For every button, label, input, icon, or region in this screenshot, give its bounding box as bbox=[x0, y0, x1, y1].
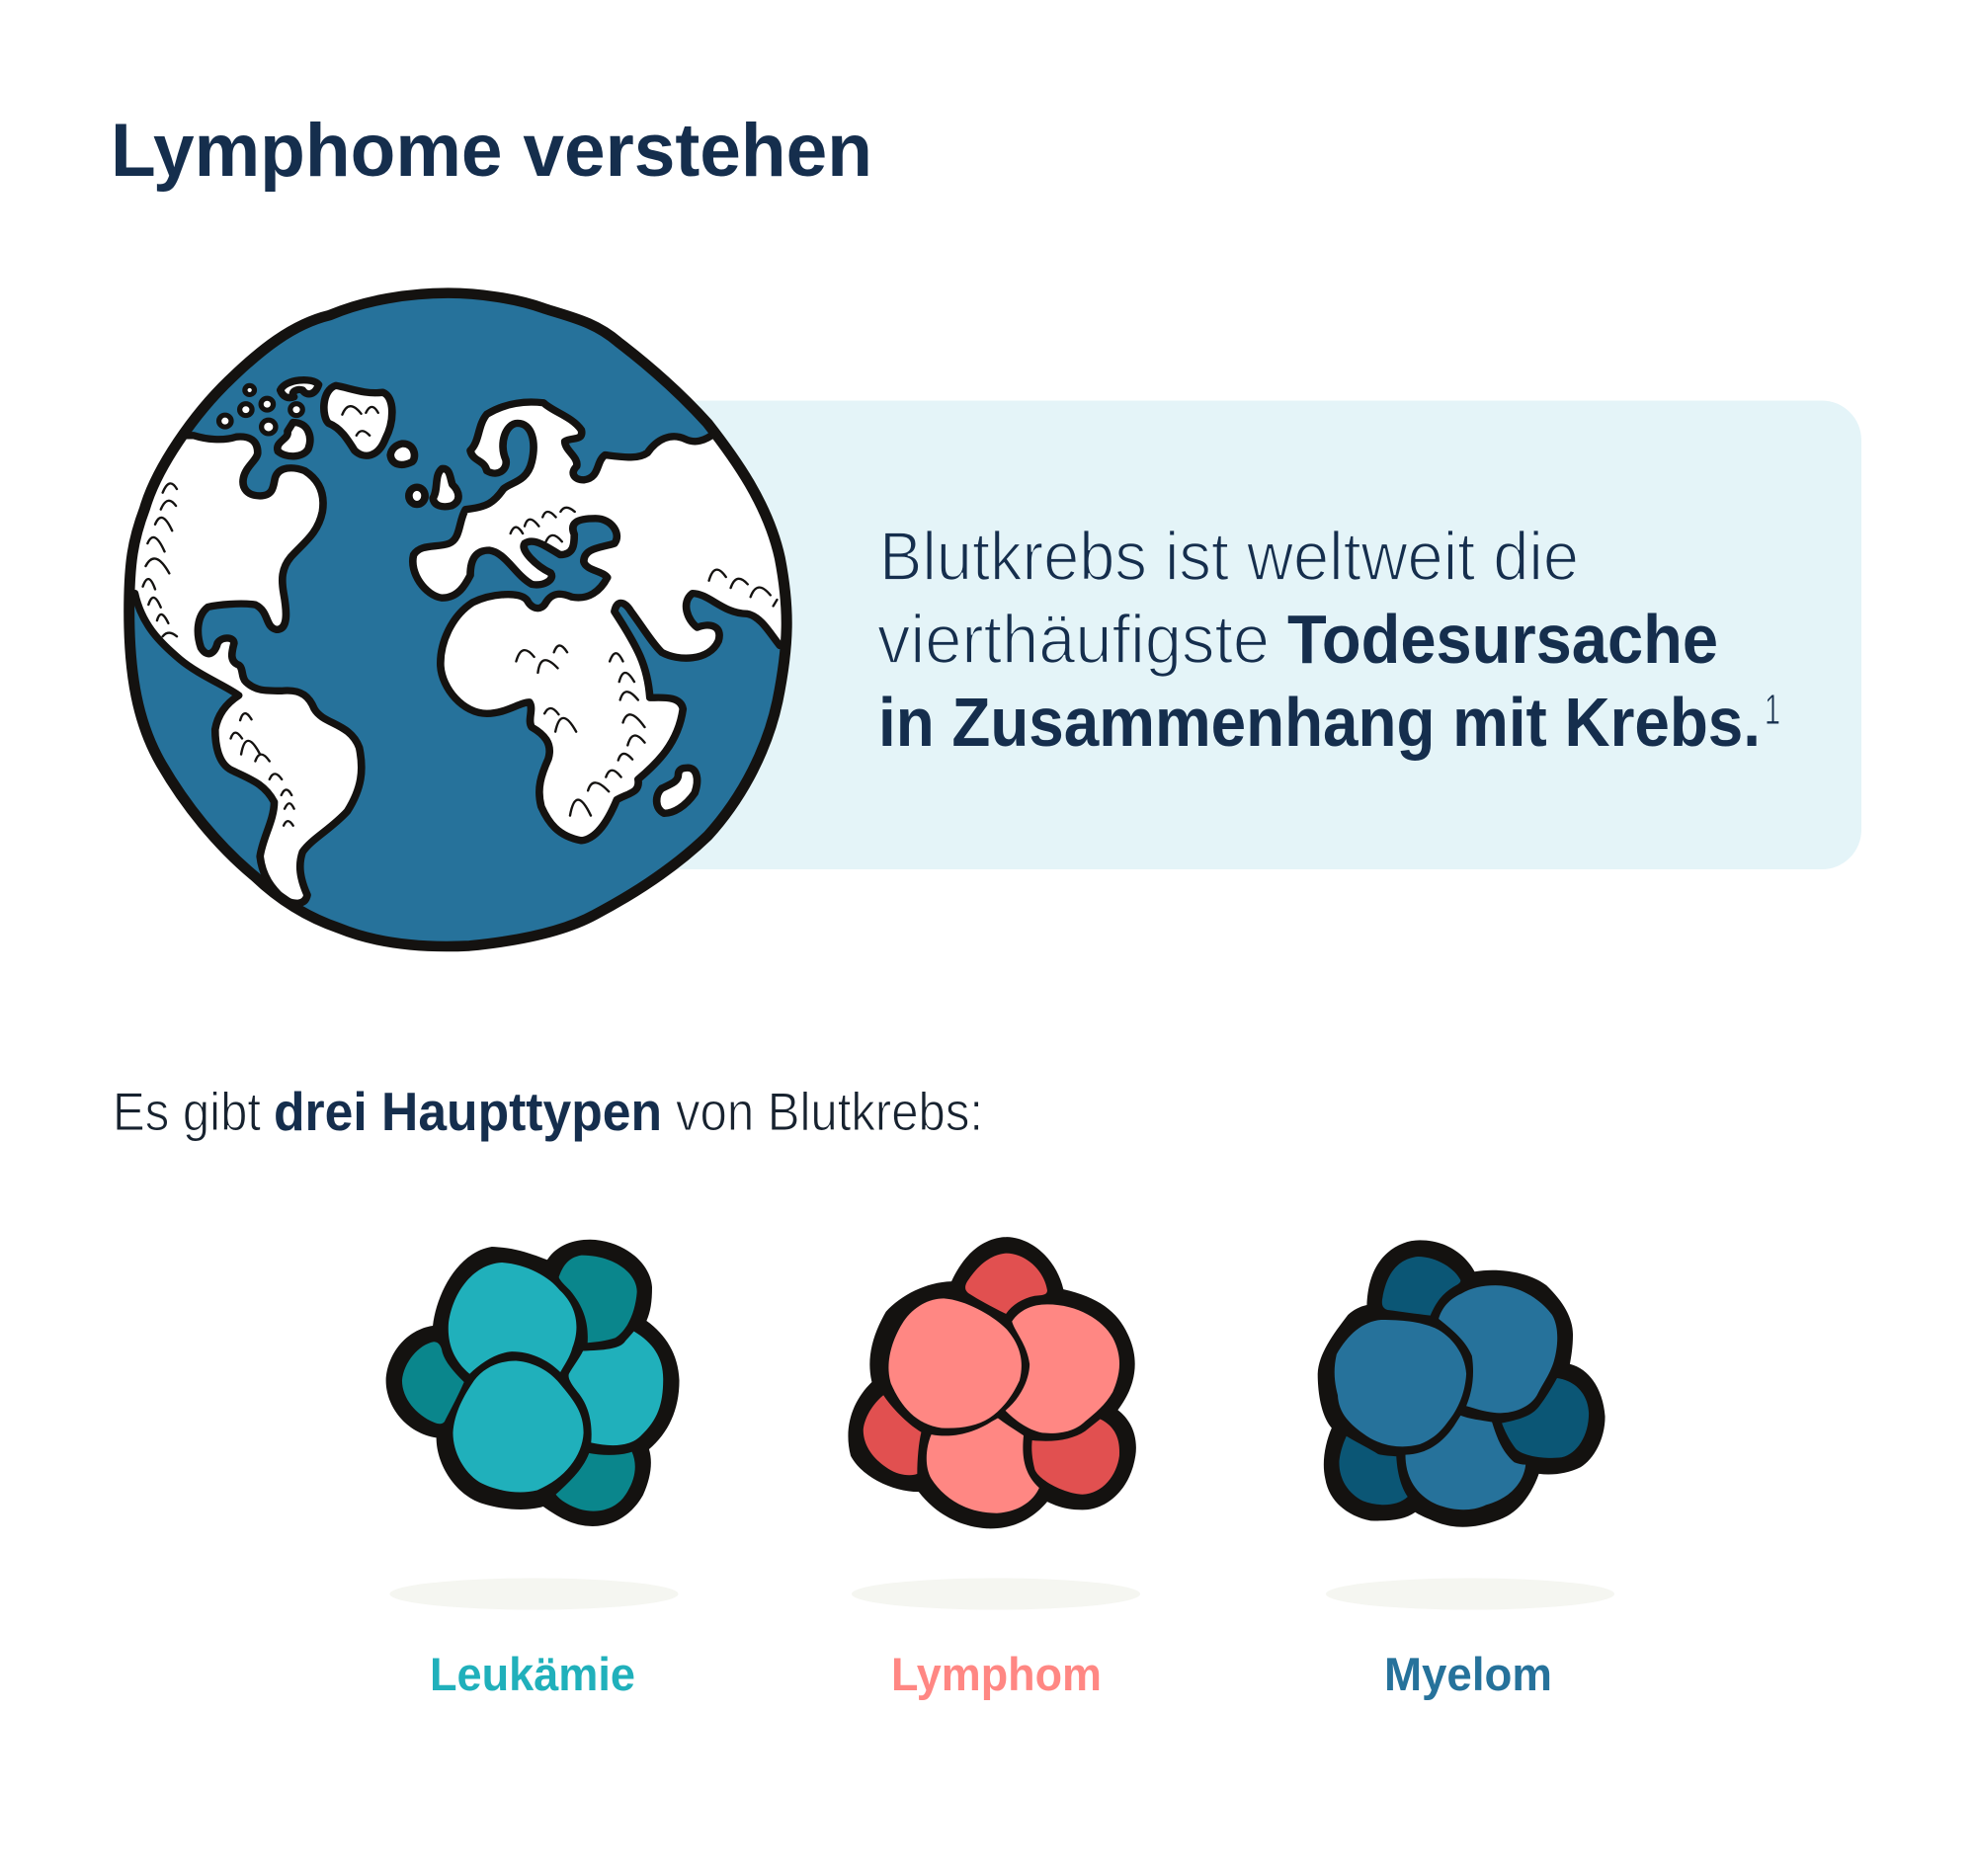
shadow: leukemia bbox=[389, 1579, 678, 1610]
callout text: Blutkrebs ist weltweit die bbox=[879, 518, 1579, 595]
label: Lymphom: Lymphom bbox=[891, 1648, 1102, 1700]
subheading: von Blutkrebs: bbox=[676, 1081, 983, 1142]
leukemia cell cluster bbox=[386, 1240, 680, 1526]
myeloma cell cluster bbox=[1318, 1240, 1606, 1527]
title: Lymphome verstehen bbox=[111, 109, 872, 193]
subheading: Es gibt bbox=[113, 1081, 261, 1142]
subheading: drei Haupttypen bbox=[274, 1081, 662, 1142]
callout text: Todesursache bbox=[1287, 601, 1718, 678]
callout text bbox=[877, 518, 1780, 761]
callout text: in Zusammenhang mit Krebs. bbox=[878, 684, 1761, 761]
panel: statistic callout bbox=[553, 401, 1861, 869]
shadow: myeloma bbox=[1326, 1579, 1614, 1610]
subheading bbox=[113, 1081, 983, 1142]
callout text: 1 bbox=[1765, 686, 1780, 734]
label: Leukämie: Leukämie bbox=[430, 1648, 635, 1700]
shadow: lymphoma bbox=[852, 1579, 1140, 1610]
icon: globe bbox=[109, 293, 818, 946]
callout text: vierthäufigste bbox=[877, 601, 1270, 678]
lymphoma cell cluster bbox=[848, 1237, 1136, 1528]
label: Myelom: Myelom bbox=[1384, 1648, 1552, 1700]
infographic canvas bbox=[116, 122, 1861, 1700]
